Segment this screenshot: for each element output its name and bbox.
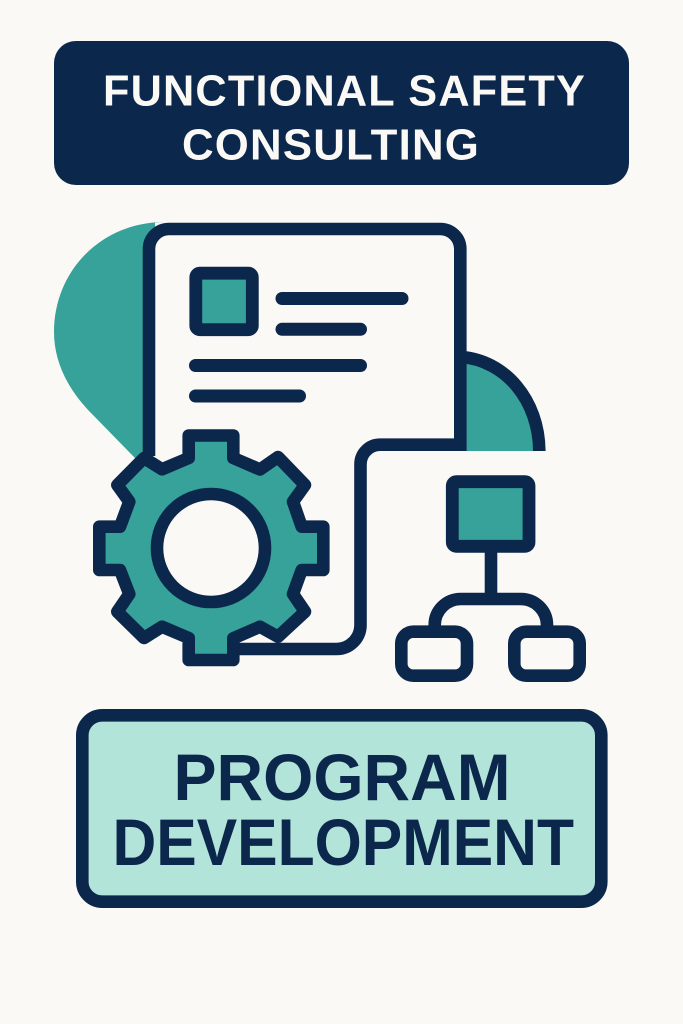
document thumbnail square xyxy=(196,273,252,330)
program development panel xyxy=(82,715,601,902)
icon: org chart xyxy=(401,482,580,676)
teal quarter circle behind document xyxy=(461,357,539,451)
icon: document xyxy=(149,229,460,649)
program development panel: PROGRAM xyxy=(174,740,510,814)
document text lines xyxy=(196,298,402,396)
title banner xyxy=(54,41,629,185)
teal blob behind document xyxy=(54,222,165,458)
title banner: FUNCTIONAL SAFETY xyxy=(103,66,586,116)
program development panel: DEVELOPMENT xyxy=(112,805,574,879)
title banner: CONSULTING xyxy=(182,120,480,170)
icon: gear xyxy=(99,436,323,660)
